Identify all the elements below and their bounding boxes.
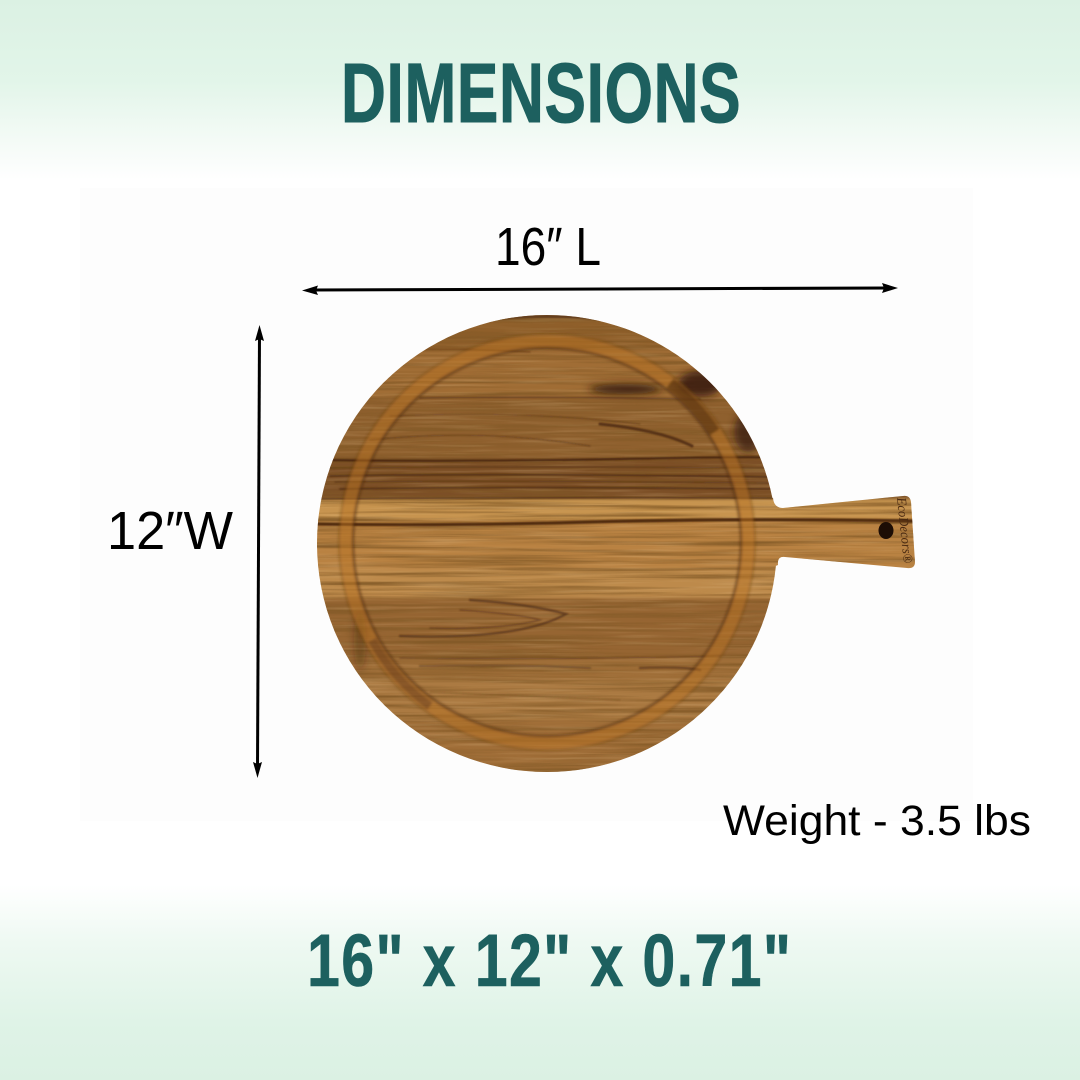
wooden cutting board bbox=[317, 315, 915, 772]
product image panel bbox=[80, 188, 973, 821]
width label: 12″W bbox=[107, 501, 233, 561]
background bottom gradient band bbox=[0, 885, 1080, 1080]
arrow: length bbox=[302, 283, 898, 295]
board dark knots bbox=[354, 371, 762, 670]
length label: 16″ L bbox=[495, 217, 601, 277]
weight label: Weight - 3.5 lbs bbox=[723, 797, 1031, 845]
overall dimensions: 16" x 12" x 0.71" bbox=[307, 920, 791, 1003]
brand mark: EcoDecors® bbox=[894, 496, 916, 564]
wood base colour bands bbox=[317, 315, 915, 772]
dark grain streaks bbox=[315, 316, 915, 700]
hanging hole bbox=[878, 522, 894, 539]
title: DIMENSIONS bbox=[341, 46, 741, 140]
arrow: width bbox=[253, 325, 264, 778]
background top gradient band bbox=[0, 0, 1080, 180]
light grain texture bbox=[317, 318, 915, 766]
wood grain texture bbox=[317, 315, 915, 772]
juice groove bbox=[339, 334, 755, 750]
